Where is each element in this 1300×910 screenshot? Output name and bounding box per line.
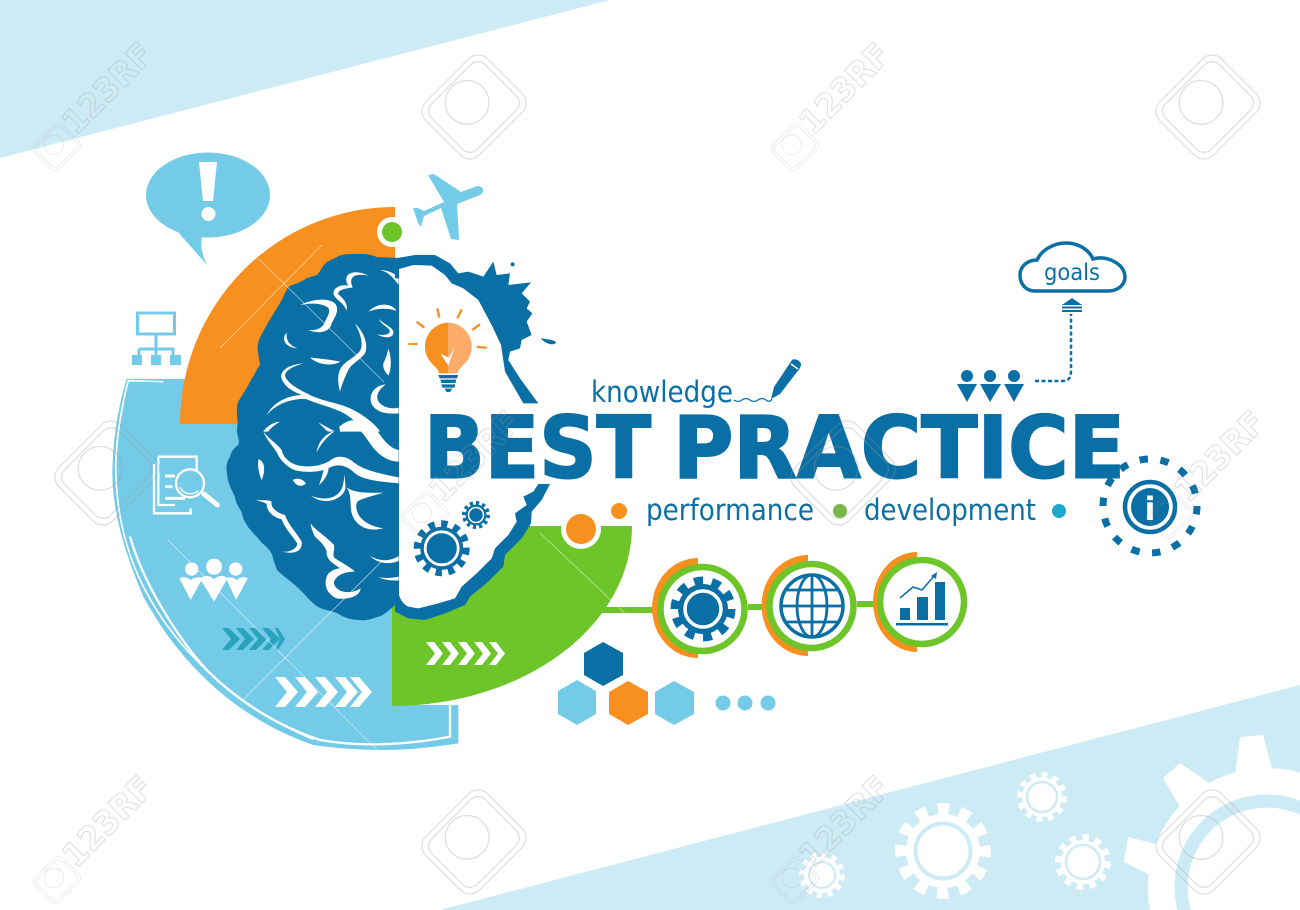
icon: info with dashed ring: i xyxy=(1145,490,1155,528)
icon: airplane xyxy=(413,174,483,240)
node: gear circle xyxy=(652,558,744,658)
orange dot on green xyxy=(561,509,601,549)
background band: top left xyxy=(0,0,610,158)
gear large xyxy=(896,804,990,898)
label: performance: performance xyxy=(646,493,814,527)
icon: light bulb xyxy=(408,308,487,392)
brain xyxy=(226,254,556,620)
brain outline lower xyxy=(395,484,550,620)
chain connector lines xyxy=(595,604,880,610)
gear small bottom xyxy=(1058,837,1108,887)
icon: white chevrons on blue xyxy=(275,677,372,707)
node: globe circle xyxy=(762,555,854,656)
node: chart circle xyxy=(873,552,964,652)
green quarter panel xyxy=(392,526,632,706)
cloud: goals xyxy=(1020,243,1125,291)
watermark stamps: 123RF xyxy=(54,768,161,875)
watermark stamps: 123RF xyxy=(54,35,161,142)
watermark stamps: 123RF xyxy=(791,35,898,142)
orange bullet xyxy=(611,503,627,519)
background band with gears: bottom right xyxy=(440,685,1300,910)
label: development: development xyxy=(864,493,1036,527)
teal bullet xyxy=(1052,504,1066,518)
brain veins upper xyxy=(263,270,399,432)
title: BEST xyxy=(424,398,651,498)
gear xyxy=(675,581,731,637)
dashed connector to cloud xyxy=(1035,314,1071,381)
ink drop xyxy=(511,262,556,344)
orange quarter panel xyxy=(180,207,395,424)
icon: speech bubble with exclamation xyxy=(146,152,270,265)
gear small top xyxy=(1020,775,1064,819)
label: knowledge: knowledge xyxy=(591,375,733,409)
brain outline and ink splash top xyxy=(395,255,538,403)
icon: small gear in brain xyxy=(464,503,488,527)
gear small left xyxy=(802,855,842,895)
icon: team people white xyxy=(179,559,248,602)
cloud label: goals xyxy=(1044,260,1100,286)
blue quarter panel xyxy=(112,379,458,750)
icon: info with dashed ring xyxy=(1103,459,1197,553)
icon: teal chevrons xyxy=(222,628,285,650)
big gear xyxy=(1124,735,1300,910)
icon: up arrow xyxy=(1062,298,1082,312)
icon: white chevrons on green xyxy=(426,642,505,665)
watermark hairlines xyxy=(168,245,632,753)
hexagons xyxy=(558,642,694,725)
three dots xyxy=(716,696,776,710)
watermark stamps: 123RF xyxy=(421,403,528,510)
title xyxy=(424,398,1125,498)
brain right hemisphere interior xyxy=(396,263,540,612)
icon: people dark xyxy=(957,370,1024,402)
title: PRACTICE xyxy=(673,398,1125,498)
icon: big gear in brain xyxy=(418,524,466,572)
icon: documents and magnifier xyxy=(154,457,217,513)
brain left hemisphere xyxy=(226,254,399,620)
brain veins lower xyxy=(256,422,399,599)
green dot xyxy=(377,217,407,247)
green bullet xyxy=(833,504,847,518)
icon: pen with squiggle xyxy=(734,359,801,402)
watermark stamps: 123RF xyxy=(1166,403,1273,510)
globe xyxy=(781,575,843,637)
watermark stamps: 123RF xyxy=(791,768,898,875)
icon: hierarchy xyxy=(132,313,181,365)
bar chart icon xyxy=(896,572,948,626)
